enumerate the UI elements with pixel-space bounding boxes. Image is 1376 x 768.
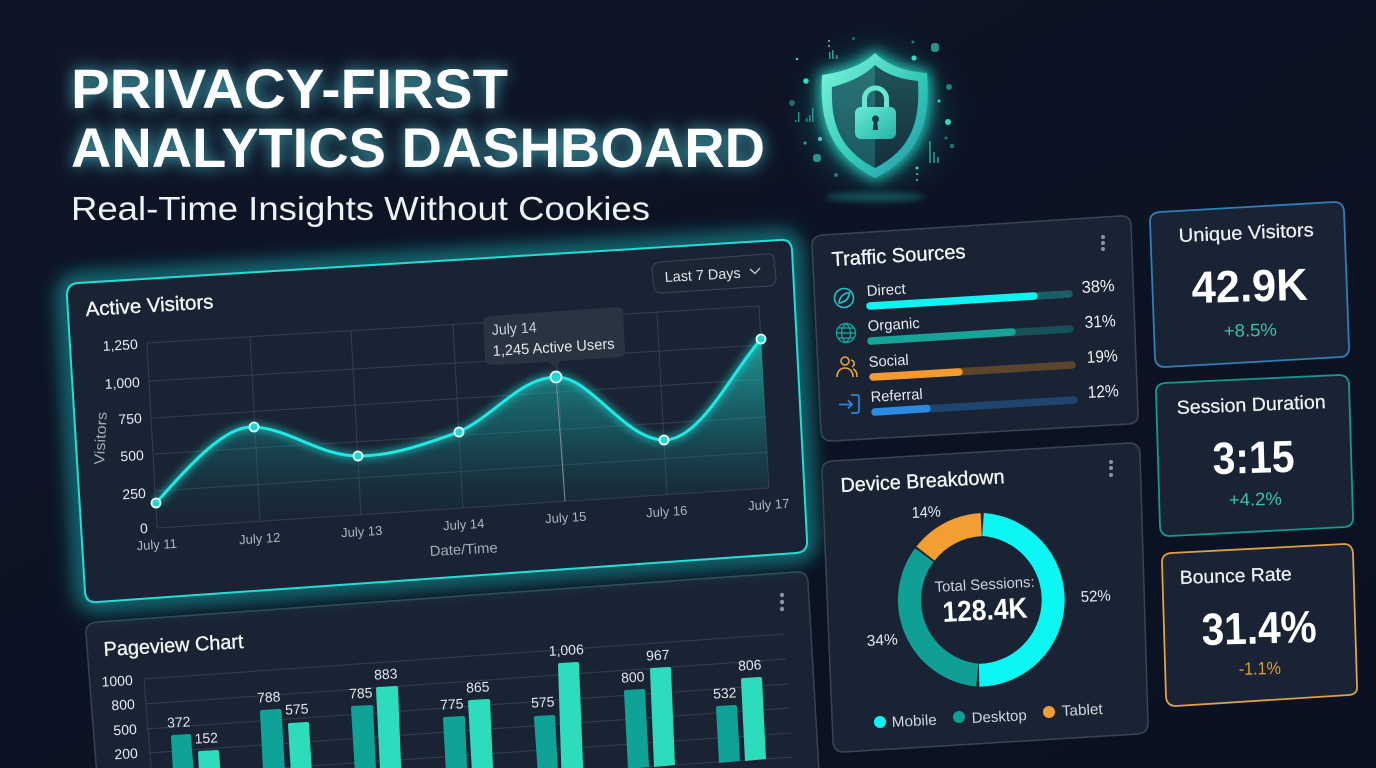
y axis labels: 1,000 <box>104 374 140 392</box>
panel: traffic sources <box>812 216 1138 441</box>
stat card: session duration <box>1156 375 1353 536</box>
area under the curve <box>156 339 769 528</box>
stat card: session duration: 3:15 <box>1212 431 1295 484</box>
pageview bar value labels: 788 <box>257 688 281 706</box>
pageview bars <box>171 662 766 768</box>
y axis labels: 250 <box>122 485 146 502</box>
donut centre total: 128.4K <box>942 593 1028 629</box>
page title: PRIVACY-FIRST <box>71 57 508 120</box>
pageview bar value labels: 152 <box>194 729 219 747</box>
panel: device breakdown <box>822 443 1148 752</box>
traffic row: direct: 38% <box>1081 276 1115 297</box>
active visitors heading: Active Visitors <box>85 291 214 321</box>
stat card: session duration: +4.2% <box>1229 489 1282 510</box>
pageview bar value labels: 575 <box>285 700 309 718</box>
pageview bar value labels: 865 <box>466 678 490 696</box>
line glow <box>156 339 761 503</box>
traffic sources heading: Traffic Sources <box>831 241 966 271</box>
pageview bar value labels: 775 <box>440 695 464 713</box>
x axis labels: July 14 <box>443 516 485 533</box>
y axis labels: 500 <box>120 447 144 464</box>
pageview bar value labels: 806 <box>738 656 762 674</box>
x axis labels <box>136 496 790 553</box>
pageview y axis labels: 1000 <box>101 672 133 690</box>
pageview bar value labels: 967 <box>646 646 670 664</box>
y axis labels <box>102 336 148 536</box>
pageview chart heading: Pageview Chart <box>103 631 244 661</box>
traffic row: direct: Direct <box>866 281 907 300</box>
pageview bar value labels: 1,006 <box>548 641 584 659</box>
pageview menu dots <box>780 593 784 611</box>
pageview bar value labels: 800 <box>621 668 645 686</box>
donut percentage labels: 34% <box>866 631 898 650</box>
device menu dots <box>1109 460 1113 477</box>
device breakdown heading: Device Breakdown <box>840 466 1005 497</box>
y axis title: Visitors <box>92 411 111 465</box>
July 15 marker line <box>556 377 565 501</box>
page title: ANALYTICS DASHBOARD <box>71 116 765 179</box>
chart tooltip <box>483 307 625 368</box>
pageview bar value labels: 785 <box>349 684 373 702</box>
pageview bar value labels: 575 <box>531 693 555 711</box>
donut legend: Tablet <box>1061 701 1104 720</box>
stat card: unique visitors <box>1150 202 1349 367</box>
x axis labels: July 16 <box>646 503 688 520</box>
page title <box>71 57 765 179</box>
panel: active visitors <box>67 240 807 602</box>
stat card: bounce rate: -1.1% <box>1239 658 1281 679</box>
stat card: unique visitors: +8.5% <box>1224 320 1277 341</box>
x axis title: Date/Time <box>429 540 498 560</box>
y axis labels: 750 <box>118 410 142 427</box>
date range dropdown <box>652 254 776 293</box>
pageview bar value labels <box>167 641 762 747</box>
donut chart <box>910 524 1053 675</box>
stat card: bounce rate: 31.4% <box>1201 601 1317 655</box>
x axis labels: July 11 <box>136 536 177 553</box>
chart data points <box>152 334 766 508</box>
traffic row: social <box>837 346 1118 377</box>
pageview bar value labels: 532 <box>713 684 737 702</box>
pageview y axis labels: 800 <box>111 696 135 713</box>
stat card: bounce rate <box>1162 544 1357 706</box>
traffic row: social: Social <box>868 352 909 371</box>
donut legend: Mobile <box>891 712 937 731</box>
pageview y axis labels: 200 <box>114 745 138 762</box>
donut percentage labels <box>866 503 1111 650</box>
stat card: unique visitors: Unique Visitors <box>1178 220 1314 247</box>
y axis labels: 0 <box>140 520 148 536</box>
panel: pageview chart <box>86 572 820 768</box>
y axis labels: 1,250 <box>102 336 138 354</box>
x axis labels: July 15 <box>545 509 587 526</box>
x axis labels: July 12 <box>239 530 281 547</box>
donut percentage labels: 52% <box>1080 587 1111 606</box>
stat card: unique visitors: 42.9K <box>1191 259 1309 313</box>
chart tooltip: July 14 <box>491 319 537 339</box>
pageview gridlines and axis <box>144 634 793 768</box>
traffic row: organic <box>836 311 1116 342</box>
donut legend <box>874 701 1104 731</box>
donut legend: Desktop <box>971 707 1027 727</box>
icon: privacy shield with padlock <box>775 15 975 215</box>
donut centre total <box>934 574 1035 629</box>
line chart grid <box>147 306 769 528</box>
visitors line <box>156 339 761 503</box>
pageview y axis labels: 500 <box>113 721 137 738</box>
traffic row: referral: Referral <box>870 386 923 406</box>
stat card: bounce rate: Bounce Rate <box>1179 564 1292 589</box>
donut percentage labels: 14% <box>911 503 941 522</box>
donut centre total: Total Sessions: <box>934 574 1035 596</box>
date range dropdown: Last 7 Days <box>664 266 741 286</box>
traffic row: organic: Organic <box>867 315 921 335</box>
pageview bar value labels: 372 <box>167 713 191 731</box>
subtitle: Real-Time Insights Without Cookies <box>71 190 650 227</box>
traffic row: organic: 31% <box>1084 311 1116 332</box>
traffic row: direct <box>834 276 1115 308</box>
stat card: session duration: Session Duration <box>1176 392 1326 419</box>
traffic row: referral: 12% <box>1087 381 1119 402</box>
x axis labels: July 13 <box>341 523 383 540</box>
chart tooltip: 1,245 Active Users <box>492 336 615 360</box>
pageview bar value labels: 883 <box>374 665 398 683</box>
traffic menu dots <box>1101 235 1105 251</box>
x axis labels: July 17 <box>748 496 790 513</box>
traffic row: social: 19% <box>1086 346 1118 367</box>
traffic row: referral <box>839 381 1119 413</box>
pageview y axis labels <box>101 672 138 762</box>
